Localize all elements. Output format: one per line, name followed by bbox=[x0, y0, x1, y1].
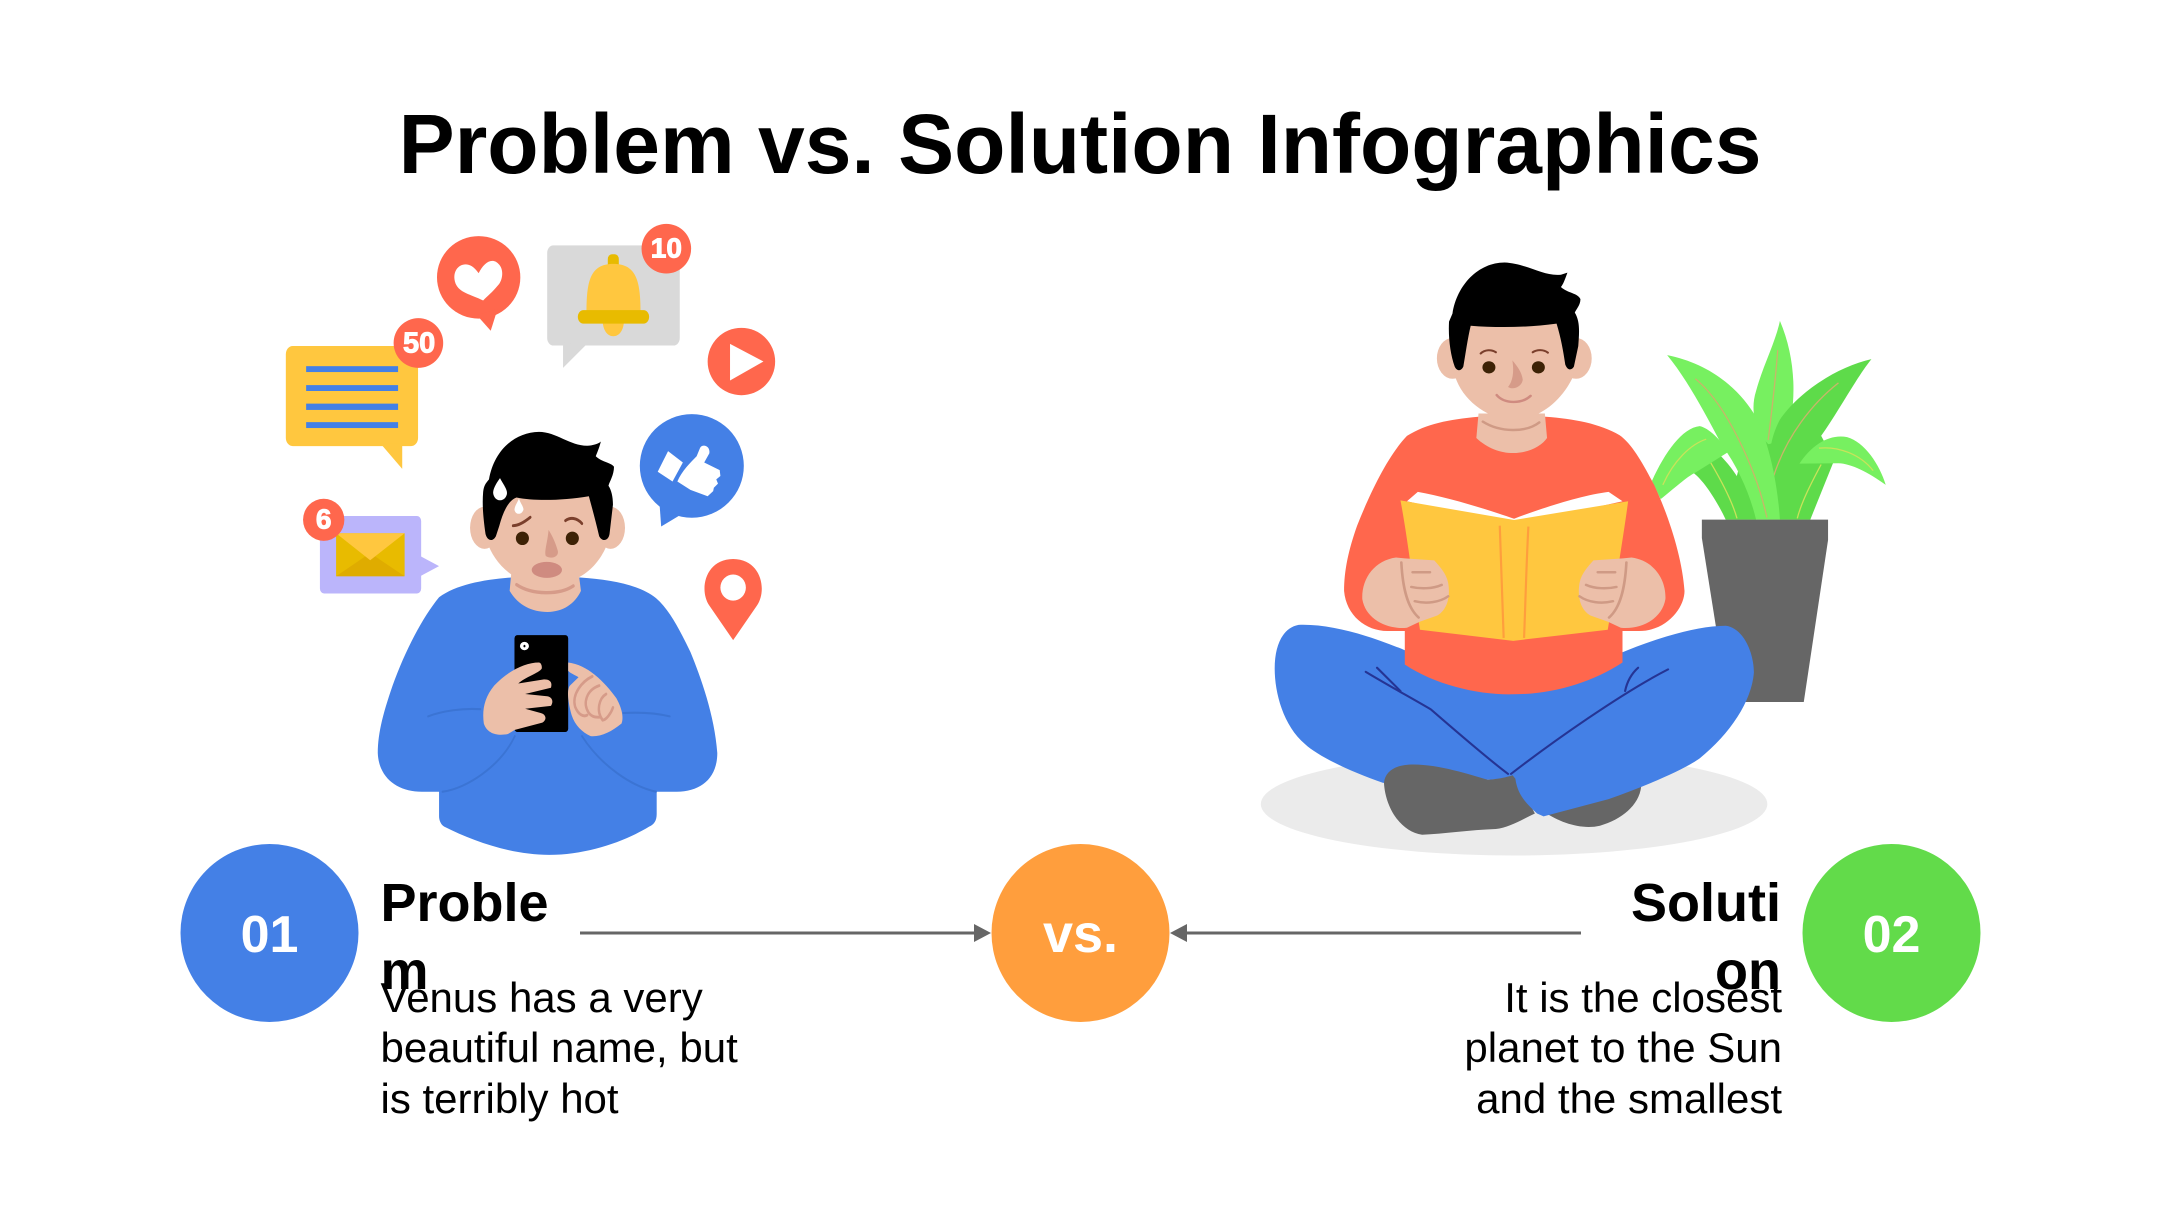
heading: problem: Proble bbox=[380, 873, 549, 933]
badge: 02 bbox=[1802, 844, 1980, 1022]
icon: thumbs up bubble bbox=[640, 414, 744, 527]
text block: solution description: It is the closest bbox=[1504, 974, 1782, 1021]
heading: problem: m bbox=[380, 941, 429, 1001]
text block: solution description: and the smallest bbox=[1476, 1075, 1782, 1122]
text block: solution description: planet to the Sun bbox=[1464, 1024, 1782, 1071]
text block: problem description: beautiful name, but bbox=[380, 1024, 738, 1071]
heading: solution: Soluti bbox=[1631, 873, 1781, 933]
person: worried man holding phone bbox=[378, 432, 717, 855]
badge: vs.: vs. bbox=[1043, 904, 1118, 964]
icon: location pin bbox=[704, 559, 762, 640]
badge: vs. bbox=[992, 844, 1170, 1022]
arrow: problem to vs bbox=[580, 924, 991, 942]
title: Problem vs. Solution Infographics bbox=[399, 97, 1761, 191]
icon: play button bbox=[708, 328, 775, 395]
badge: 01 bbox=[180, 844, 358, 1022]
icon: message bubble bbox=[286, 318, 443, 469]
arrow: solution to vs bbox=[1170, 924, 1581, 942]
person: smiling man reading a book bbox=[1275, 262, 1754, 835]
heading: solution: on bbox=[1715, 941, 1781, 1001]
icon: mail bubble bbox=[303, 499, 439, 593]
icon: bell notification bubble bbox=[547, 224, 691, 368]
icon: message bubble: 50 bbox=[403, 327, 435, 359]
illustration: person reading with plant bbox=[1261, 262, 1886, 856]
icon: mail bubble: 6 bbox=[316, 504, 331, 535]
text block: problem description: Venus has a very bbox=[380, 974, 703, 1021]
floor shadow bbox=[1261, 753, 1767, 856]
text block: problem description: is terribly hot bbox=[380, 1075, 619, 1122]
illustration: overwhelmed person with notifications bbox=[286, 224, 775, 855]
badge: 01: 01 bbox=[241, 906, 298, 964]
plant bbox=[1652, 321, 1886, 702]
icon: heart bubble bbox=[437, 236, 520, 331]
icon: bell notification bubble: 10 bbox=[651, 233, 682, 264]
badge: 02: 02 bbox=[1863, 906, 1920, 964]
